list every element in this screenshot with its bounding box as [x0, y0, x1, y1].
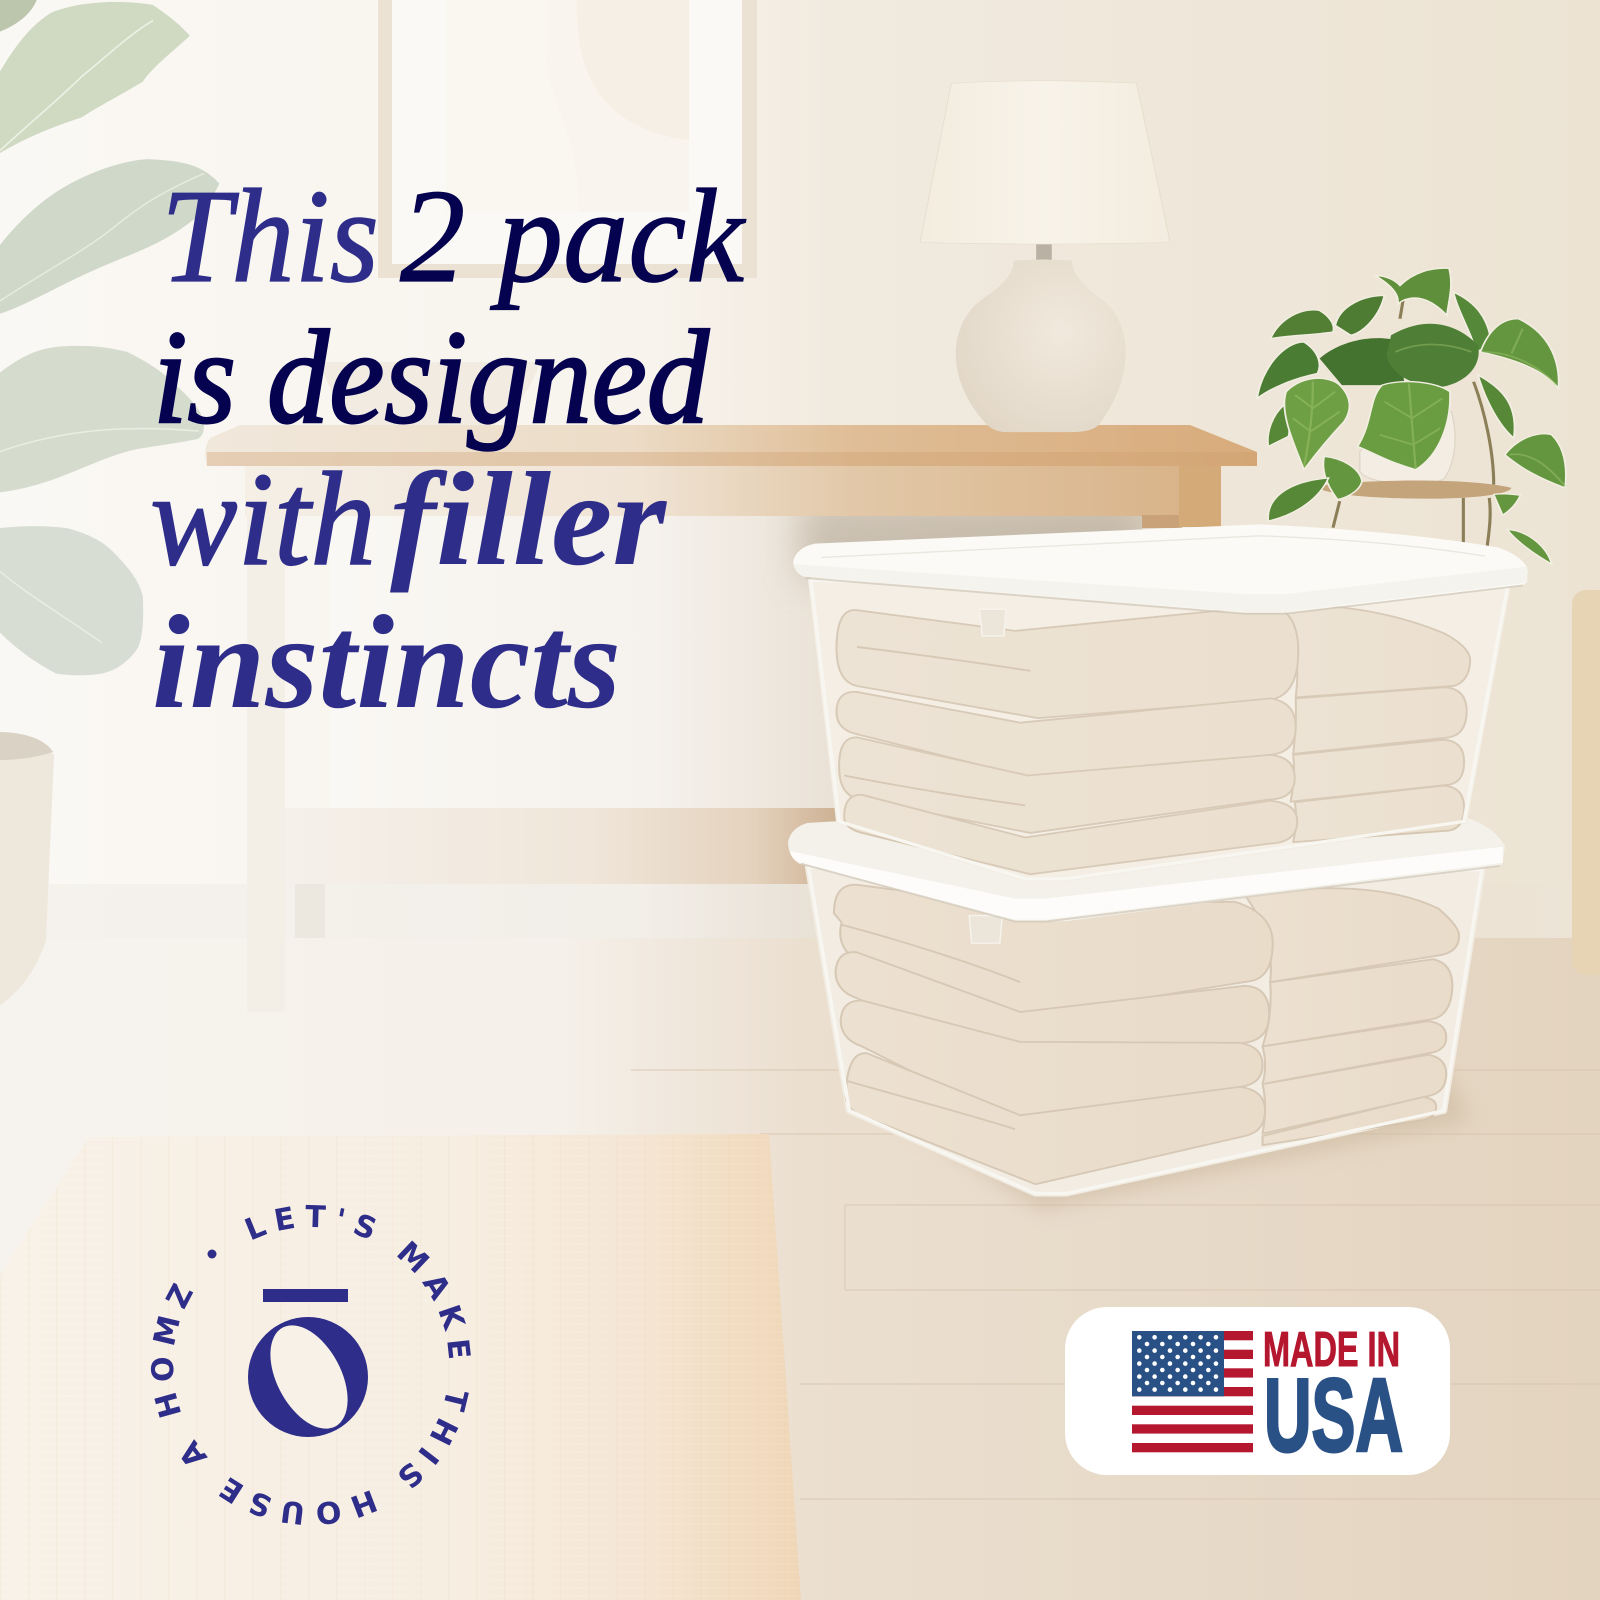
plant pot — [1360, 412, 1455, 484]
lower bin plastic shell — [808, 867, 1482, 1193]
separator dot — [208, 1250, 216, 1258]
sofa edge — [1572, 590, 1600, 975]
upper bin plastic shell — [811, 580, 1507, 879]
made in text: MADE IN — [1263, 1323, 1400, 1377]
table lamp — [920, 81, 1170, 432]
floor plank seams — [631, 1070, 1600, 1499]
lower storage bin with towels — [791, 819, 1503, 1193]
lamp neck — [1036, 242, 1052, 262]
upper lid clips — [979, 609, 1006, 636]
circular slogan: LET'S MAKE THIS HOUSE A HOMZ — [150, 1204, 471, 1525]
fiddle leaf plant — [0, 0, 219, 675]
baseboard — [0, 884, 1600, 938]
round stand — [1315, 481, 1512, 499]
lower bin lid — [791, 819, 1503, 922]
faint bowl on table — [320, 362, 540, 435]
upper towels — [837, 605, 1470, 874]
american flag — [1132, 1331, 1253, 1452]
line 1: This — [161, 162, 379, 310]
patterned rug — [0, 1134, 801, 1600]
wall art frame — [378, 0, 757, 278]
pothos plant on stand — [1257, 268, 1566, 564]
line 1 — [161, 162, 746, 310]
upper bin lid — [794, 527, 1527, 614]
line 3: with — [150, 445, 376, 593]
wood floor — [0, 938, 1600, 1600]
line 4: instincts — [152, 588, 621, 736]
made in USA badge — [1065, 1307, 1450, 1475]
logo macron bar — [263, 1289, 348, 1302]
line 3 — [150, 445, 668, 593]
lower towel creases — [842, 925, 1020, 1129]
badge background — [1065, 1307, 1450, 1475]
upper bin body — [811, 580, 1507, 879]
lamp base — [956, 260, 1126, 432]
line 1: 2 pack — [400, 162, 746, 310]
headline — [150, 162, 746, 736]
logo o mark — [248, 1313, 368, 1441]
pothos leaves — [1257, 268, 1566, 564]
lower towels — [834, 885, 1459, 1184]
console table — [205, 425, 1257, 1012]
line 3: filler — [390, 445, 668, 593]
USA text: USA — [1264, 1358, 1403, 1474]
wall — [0, 0, 1600, 890]
wall below console table — [330, 500, 1142, 808]
lower lid clips — [969, 916, 1002, 943]
floor shadow under bins — [860, 1060, 1470, 1210]
leaf veins — [1293, 329, 1565, 486]
lamp shade — [920, 81, 1170, 244]
brand logo seal — [150, 1204, 471, 1525]
upper towel creases — [844, 647, 1030, 805]
woven basket — [0, 732, 54, 1005]
upper storage bin with towels — [794, 527, 1527, 879]
lower bin body — [808, 867, 1482, 1193]
line 2: is designed — [153, 303, 710, 451]
